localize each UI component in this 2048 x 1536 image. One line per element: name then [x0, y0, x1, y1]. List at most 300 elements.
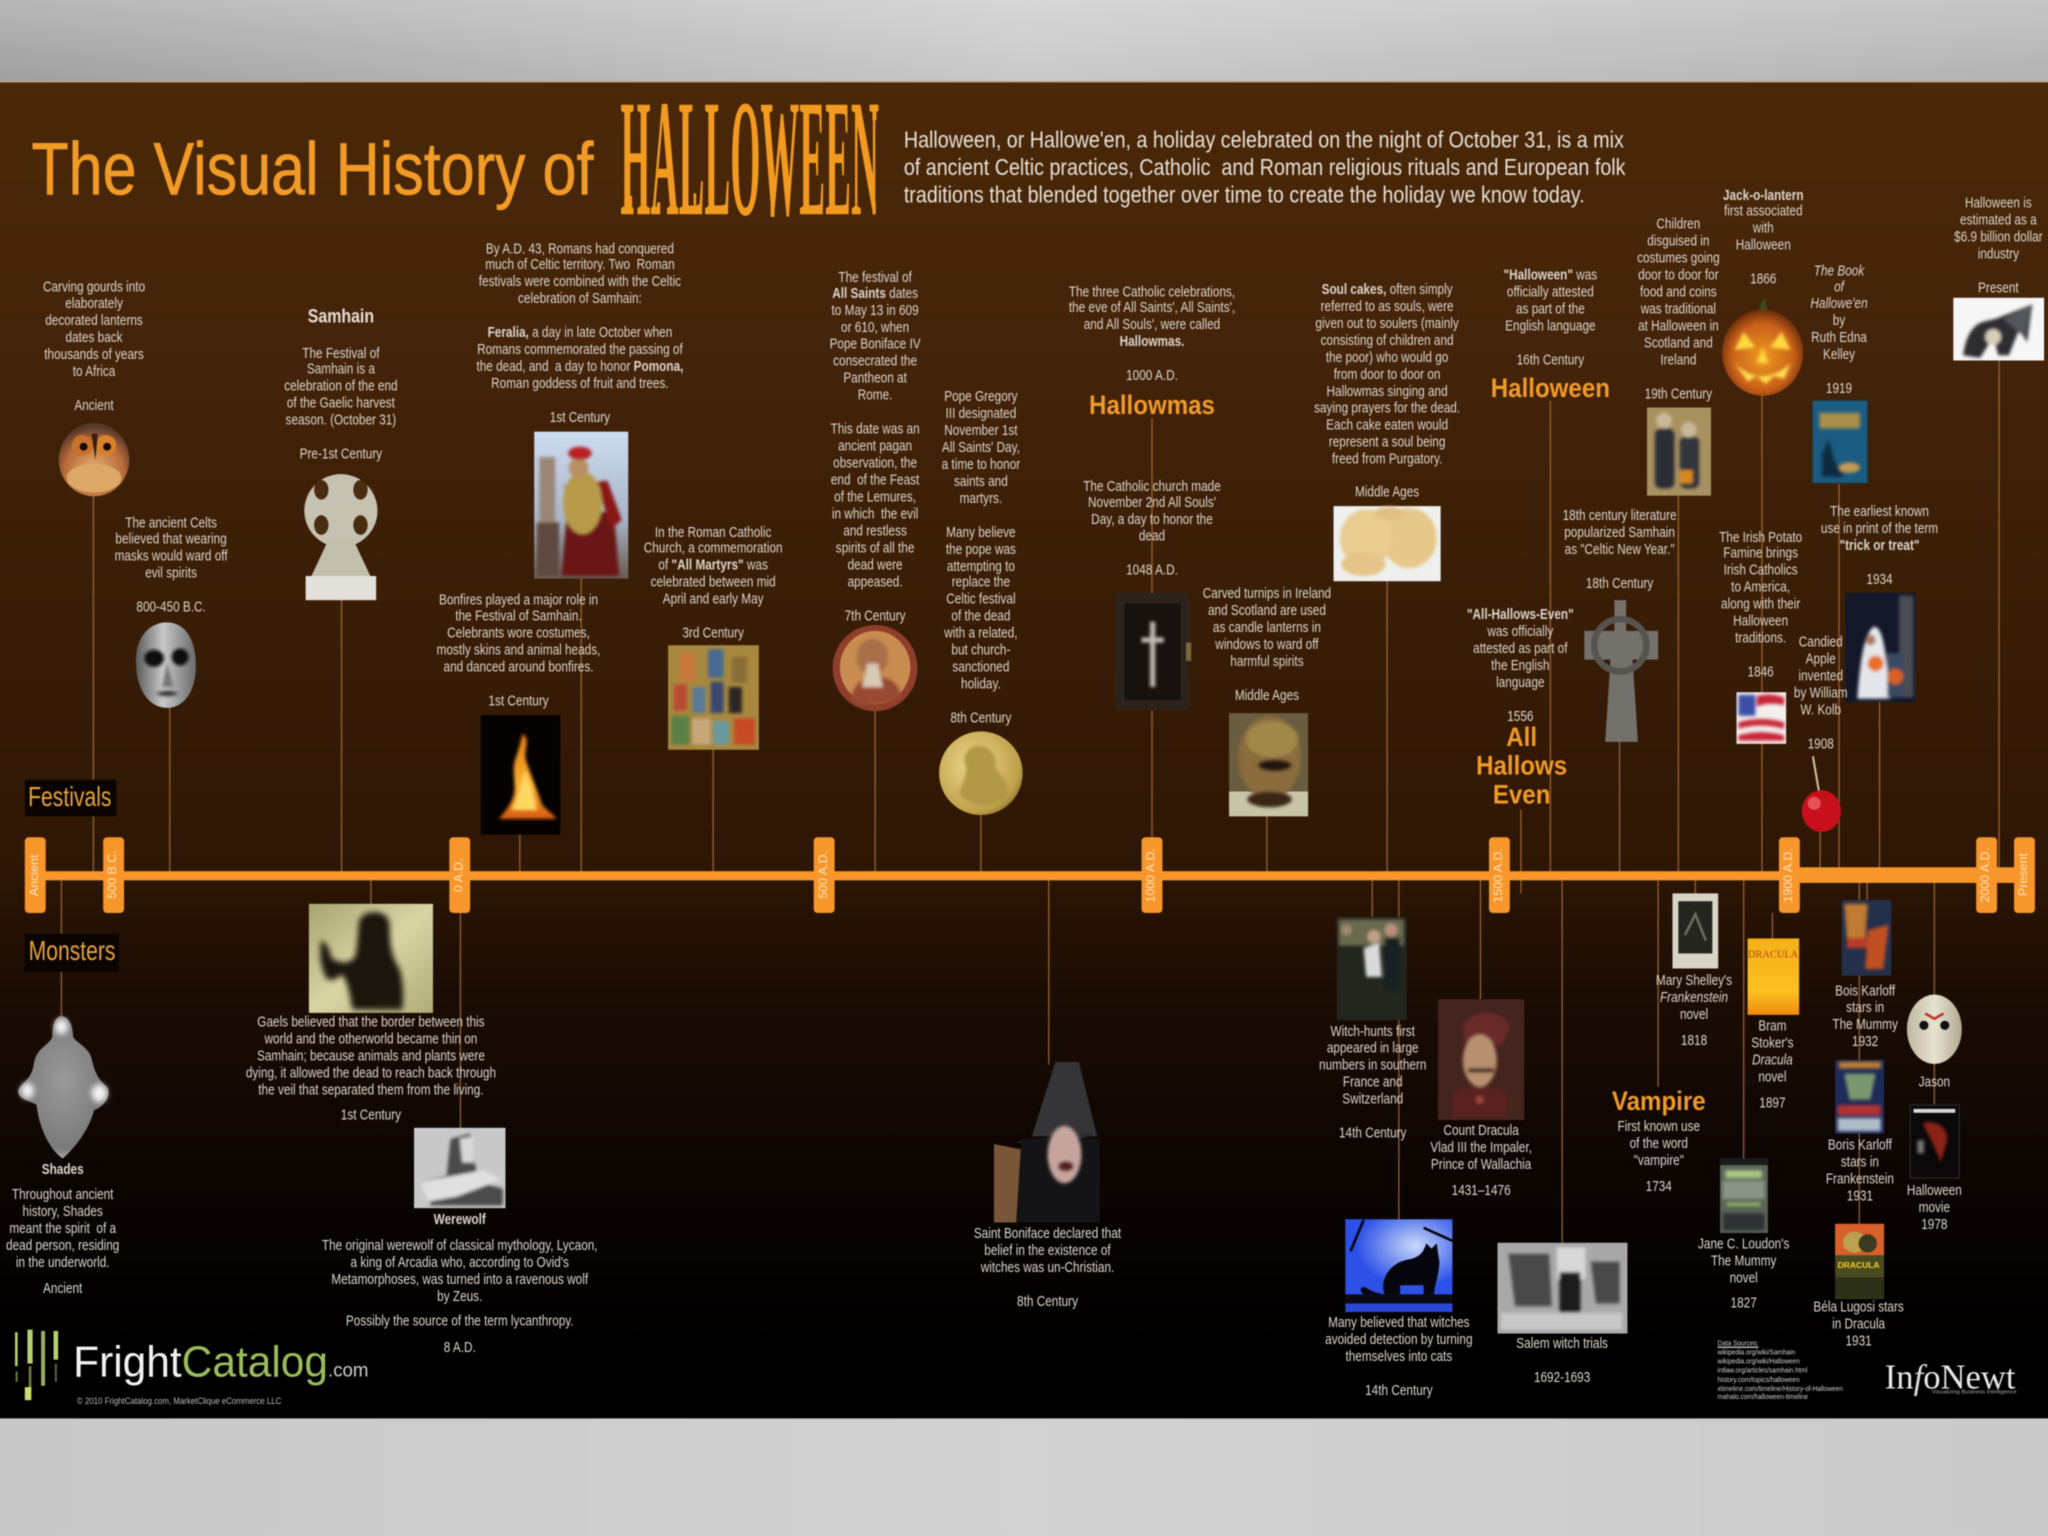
- tick: Present: Present: [2017, 854, 2031, 896]
- text: Bela Lugosi: Béla Lugosi stars: [1813, 1300, 1904, 1315]
- tick: 2000 A.D.: [1976, 837, 1997, 913]
- text: Pope Gregory: but church-: [951, 643, 1010, 659]
- text: candied apple: Apple: [1805, 652, 1835, 667]
- text: Bram Stoker: novel 1897: [1758, 1070, 1786, 1111]
- intro paragraph: traditions that blended together over time to create the holiday we know today.: [904, 182, 1585, 208]
- heading: Hallowmas: Hallowmas: [1089, 391, 1215, 421]
- text: All Martyrs: 3rd Century: [682, 626, 744, 642]
- text: witches into cats: avoided detection by turning: [1325, 1332, 1473, 1348]
- text: All Saints: and restless: [843, 523, 907, 539]
- image: Vlad the Impaler portrait: [1438, 999, 1524, 1120]
- tick: 2000 A.D.: 2000 A.D.: [1979, 848, 1993, 902]
- text: Gaels believed: dying, it allowed the dead to reach back through: [245, 1066, 495, 1081]
- image: witch-hunt painting: [1337, 917, 1407, 1020]
- text: Halloween attested: "Halloween" was: [1504, 268, 1597, 283]
- text: All Saints: This date was an: [831, 422, 920, 438]
- image: Dracula novel: [1748, 938, 1799, 1015]
- text: Gaels believed: [245, 1014, 496, 1124]
- text: Shades: meant the spirit of a: [9, 1221, 116, 1237]
- text: All Saints: or 610, when: [841, 320, 909, 336]
- heading: All Hallows Even: [1475, 722, 1567, 810]
- image: shadow figure behind veil: [309, 904, 433, 1013]
- text: All Saints: appeased.: [848, 574, 903, 590]
- text: soul cakes: referred to as souls, were: [1321, 299, 1454, 315]
- text: Celtic New Year: [1562, 508, 1677, 592]
- intro paragraph: [903, 127, 1626, 208]
- text: Karloff The Mummy: stars in: [1846, 1000, 1884, 1016]
- text: ancient Celts masks: [114, 515, 228, 616]
- image: Mummy novel: [1720, 1159, 1768, 1233]
- image: trick or treat photo: [1846, 593, 1915, 702]
- text: All Saints: dead were: [848, 557, 903, 573]
- text: Pope Gregory: replace the: [952, 575, 1010, 591]
- text: Werewolf: Werewolf The original werewolf of classical mythology, Lycaon,: [322, 1212, 598, 1254]
- image: stone Celtic cross: [304, 474, 377, 600]
- text: carving gourds: thousands of years: [44, 347, 143, 363]
- tick: 1500 A.D.: 1500 A.D.: [1491, 848, 1505, 902]
- text: jack-o-lantern: Halloween: [1736, 238, 1791, 254]
- tick: 1500 A.D.: [1488, 837, 1509, 913]
- text: Halloween movie: 1978: [1921, 1217, 1947, 1233]
- text: three Catholic celebrations: the eve of All Saints', All Saints',: [1069, 301, 1235, 317]
- text: Book of Hallowe'en: 1919: [1826, 382, 1852, 397]
- text: bonfires: [436, 592, 600, 710]
- text: bonfires: Celebrants wore costumes,: [447, 626, 590, 642]
- text: Irish Potato Famine: 1846: [1748, 665, 1774, 681]
- text: bonfires: and danced around bonfires.: [444, 660, 594, 676]
- text: Bela Lugosi: 1931: [1845, 1333, 1872, 1349]
- text: industry estimate: Present: [1978, 281, 2019, 296]
- heading: All Hallows Even: Hallows: [1475, 751, 1567, 781]
- text: Book of Hallowe'en: [1810, 263, 1868, 397]
- image: Salem witch trials engraving: [1497, 1243, 1627, 1334]
- text: Shades: Shades Throughout ancient: [12, 1162, 113, 1203]
- text: All Souls' Day: November 2nd All Souls': [1088, 496, 1216, 511]
- text: All Saints: end of the Feast: [831, 473, 919, 488]
- text: Bela Lugosi: in Dracula: [1832, 1317, 1885, 1332]
- text: Pope Gregory: with a related,: [944, 626, 1018, 642]
- text: Jane Loudon: novel 1827: [1730, 1271, 1758, 1311]
- image: Jason hockey mask: [1907, 995, 1962, 1064]
- tick: Ancient: Ancient: [27, 854, 42, 896]
- text: Romans and Feralia: 1st Century: [550, 410, 610, 426]
- text: children in costume: Scotland and: [1644, 335, 1713, 351]
- text: jack-o-lantern: first associated: [1724, 204, 1803, 220]
- text: Irish Potato Famine: Irish Catholics: [1724, 563, 1798, 579]
- text: carved turnips: harmful spirits: [1230, 654, 1304, 670]
- data sources: Data Sources:: [1718, 1340, 1759, 1348]
- text: All Saints: observation, the: [833, 456, 917, 471]
- intro paragraph: Halloween, or Hallowe'en, a holiday celebrated on the night of October 31, is a mix: [904, 127, 1624, 153]
- title: Halloween wordmark: HALLOWEEN: [620, 65, 879, 251]
- image: jack-o'-lantern: [1722, 298, 1803, 396]
- text: Bram Stoker: Stoker's: [1751, 1036, 1794, 1051]
- text: children in costume: was traditional: [1641, 301, 1716, 317]
- text: three Catholic celebrations: and All Souls', were called: [1084, 318, 1220, 334]
- text: ancient Celts masks: 800-450 B.C.: [136, 600, 206, 616]
- text: Count Dracula: Vlad III the Impaler,: [1430, 1140, 1531, 1156]
- text: Saint Boniface: Saint Boniface declared that: [974, 1226, 1121, 1242]
- text: soul cakes: the poor) who would go: [1326, 350, 1448, 365]
- text: Jane Loudon: [1698, 1236, 1790, 1311]
- InfoNewt tagline: Visualizing Business Intelligence: [1932, 1388, 2017, 1395]
- text: Romans and Feralia: much of Celtic territory. Two Roman: [485, 258, 675, 274]
- intro paragraph: of ancient Celtic practices, Catholic and Roman religious rituals and European folk: [904, 154, 1626, 180]
- text: trick or treat: "trick or treat": [1840, 538, 1919, 554]
- text: Celtic New Year: popularized Samhain: [1564, 525, 1675, 541]
- image: candied apple: [1802, 756, 1841, 832]
- data sources: xtimeline.com/timeline/History-of-Halloween: [1718, 1385, 1843, 1393]
- image: soul cakes: [1334, 506, 1441, 581]
- text: All-Hallows-Even: [1467, 607, 1574, 725]
- text: festival of Samhain: Pre-1st Century: [300, 447, 382, 463]
- text: carved turnips: as candle lanterns in: [1213, 620, 1321, 636]
- text: Irish Potato Famine: [1718, 530, 1802, 681]
- text: three Catholic celebrations: 1000 A.D.: [1126, 369, 1178, 384]
- text: witch-hunts: appeared in large: [1326, 1041, 1418, 1057]
- text: All Saints: consecrated the: [833, 354, 917, 370]
- text: Pope Gregory: attempting to: [947, 558, 1015, 574]
- text: Halloween movie: [1906, 1183, 1962, 1233]
- text: All Saints: of the Lemures,: [834, 490, 916, 505]
- text: Saint Boniface: witches was un-Christian.: [981, 1260, 1114, 1276]
- text: Pope Gregory: III designated: [946, 406, 1016, 422]
- text: All Saints: All Saints dates: [832, 287, 918, 302]
- text: festival of Samhain: [284, 345, 398, 463]
- text: jack-o-lantern: Jack-o-lantern: [1723, 187, 1804, 203]
- text: jack-o-lantern: 1866: [1750, 272, 1776, 288]
- image: shade ghost: [18, 1016, 109, 1159]
- text: Irish Potato Famine: The Irish Potato: [1719, 530, 1802, 545]
- text: Book of Hallowe'en: Hallowe'en: [1810, 297, 1868, 313]
- text: festival of Samhain: The Festival of: [302, 345, 380, 361]
- text: Book of Hallowe'en: of: [1834, 280, 1844, 296]
- text: soul cakes: Hallowmas singing and: [1327, 384, 1448, 399]
- text: carved turnips: Carved turnips in Ireland: [1203, 586, 1331, 602]
- text: bonfires: mostly skins and animal heads,: [437, 643, 600, 659]
- text: children in costume: 19th Century: [1645, 386, 1712, 402]
- text: Bela Lugosi: [1813, 1300, 1904, 1349]
- text: jack-o-lantern: [1722, 187, 1804, 288]
- data sources: mahalo.com/halloween-timeline: [1718, 1394, 1808, 1402]
- text: Bram Stoker: Bram: [1758, 1019, 1786, 1034]
- text: Pope Gregory: November 1st: [944, 423, 1018, 439]
- text: Halloween attested: 16th Century: [1517, 352, 1584, 368]
- text: first known use of vampire: [1617, 1119, 1700, 1195]
- text: Romans and Feralia: celebration of Samhain:: [518, 292, 642, 307]
- text: children in costume: [1636, 216, 1720, 402]
- text: All Martyrs: of "All Martyrs" was: [658, 558, 768, 574]
- text: Werewolf: Metamorphoses, was turned into a ravenous wolf: [331, 1272, 588, 1288]
- text: Gaels believed: the veil that separated them from the living. 1st Century: [258, 1083, 483, 1123]
- text: Pope Gregory: holiday.: [961, 677, 1001, 693]
- data sources: intlaw.org/articles/samhain.html: [1718, 1367, 1807, 1375]
- text: trick or treat: use in print of the term: [1821, 521, 1938, 537]
- text: Count Dracula: Prince of Wallachia 1431–1476: [1430, 1157, 1531, 1199]
- text: Karloff Frankenstein: Frankenstein: [1826, 1171, 1894, 1187]
- text: carving gourds: to Africa: [72, 364, 115, 380]
- data sources: wikipedia.org/wiki/Samhain: [1718, 1349, 1795, 1357]
- data sources: wikipedia.org/wiki/Halloween: [1718, 1358, 1800, 1366]
- text: Book of Hallowe'en: by: [1833, 314, 1845, 330]
- text: Salem witch trials: [1516, 1336, 1608, 1386]
- text: Count Dracula: [1430, 1123, 1532, 1199]
- tick: 500 B.C.: 500 B.C.: [106, 851, 120, 899]
- tick: Ancient: [25, 837, 46, 913]
- tick: 1000 A.D.: [1142, 837, 1162, 913]
- text: Shades: [6, 1162, 120, 1297]
- heading: All Hallows Even: Even: [1492, 780, 1550, 810]
- text: ancient Celts masks: masks would ward off: [115, 549, 228, 565]
- text: industry estimate: estimated as a: [1960, 213, 2037, 229]
- text: Saint Boniface: [974, 1226, 1122, 1310]
- text: Mary Shelley: Frankenstein: [1660, 990, 1728, 1006]
- text: Pope Gregory: saints and: [954, 474, 1008, 489]
- text: bonfires: the Festival of Samhain.: [455, 609, 582, 625]
- text: witches into cats: 14th Century: [1365, 1383, 1433, 1399]
- text: children in costume: Ireland: [1660, 352, 1696, 368]
- text: carved turnips: Middle Ages: [1235, 688, 1299, 704]
- text: Pope Gregory: Pope Gregory: [944, 389, 1018, 405]
- text: All Saints: to May 13 in 609: [832, 304, 919, 319]
- text: bonfires: 1st Century: [488, 694, 549, 710]
- text: Romans and Feralia: By A.D. 43, Romans had conquered: [486, 241, 674, 257]
- text: All Souls' Day: Day, a day to honor the: [1091, 513, 1213, 528]
- text: Werewolf: by Zeus. Possibly the source of the term lycanthropy. 8 A.D.: [346, 1289, 574, 1355]
- text: Mary Shelley: novel 1818: [1680, 1007, 1708, 1049]
- image: The Mummy poster: [1842, 900, 1891, 976]
- text: Celtic New Year: 18th century literature: [1563, 508, 1677, 524]
- image: Dracula poster: DRACULA: [1838, 1260, 1880, 1270]
- logo: FrightCatalog: FrightCatalog.com: [72, 1337, 368, 1386]
- text: candied apple: W. Kolb: [1800, 702, 1840, 718]
- category label: Festivals: Festivals: [28, 782, 112, 812]
- text: Jane Loudon: Jane C. Loudon's: [1698, 1237, 1789, 1253]
- text: soul cakes: Each cake eaten would: [1326, 417, 1448, 433]
- text: trick or treat: [1820, 504, 1938, 588]
- text: Romans and Feralia: festivals were combined with the Celtic: [479, 275, 681, 290]
- text: Pope Gregory: sanctioned: [952, 660, 1009, 676]
- text: festival of Samhain: Samhain is a: [307, 362, 375, 378]
- heading: Vampire: Vampire: [1611, 1087, 1705, 1117]
- image: witch figure, present: [1953, 298, 2044, 360]
- text: witch-hunts: Switzerland: [1342, 1092, 1403, 1107]
- text: Romans and Feralia: Feralia, a day in late October when: [488, 326, 672, 341]
- text: Salem witch trials: 1692-1693: [1534, 1370, 1590, 1386]
- text: trick or treat: The earliest known: [1830, 504, 1929, 520]
- tick: 1900 A.D.: [1779, 837, 1800, 913]
- text: Karloff Frankenstein: 1931: [1847, 1188, 1873, 1204]
- text: Book of Hallowe'en: Kelley: [1823, 348, 1855, 363]
- text: Pope Gregory: of the dead: [951, 609, 1010, 625]
- text: Saint Boniface: belief in the existence of: [984, 1243, 1111, 1259]
- text: carved turnips: [1202, 586, 1332, 704]
- data sources: history.com/topics/halloween: [1718, 1376, 1800, 1384]
- text: All Saints: 7th Century: [845, 608, 906, 624]
- text: All Saints: Rome.: [858, 388, 892, 404]
- text: ancient Celts masks: believed that wearing: [115, 532, 227, 548]
- text: soul cakes: Middle Ages: [1355, 485, 1419, 501]
- text: Karloff Frankenstein: [1826, 1138, 1894, 1204]
- text: Pope Gregory: 8th Century: [950, 711, 1011, 726]
- image: Pope Boniface portrait: [833, 625, 918, 711]
- text: carving gourds: elaborately: [65, 296, 122, 312]
- text: three Catholic celebrations: [1068, 284, 1235, 384]
- data sources: [1718, 1340, 1843, 1403]
- tick: Present: [2014, 837, 2035, 913]
- image: All Martyrs painting: [668, 645, 759, 750]
- image: Halloween movie poster: [1910, 1105, 1959, 1178]
- text: Jason: Jason: [1918, 1075, 1949, 1091]
- heading: All Hallows Even: All: [1506, 722, 1536, 752]
- text: Halloween attested: [1504, 268, 1598, 368]
- text: Mary Shelley: Mary Shelley's: [1656, 973, 1732, 989]
- text: All Souls' Day: The Catholic church made: [1083, 479, 1221, 494]
- text: All Saints: Pantheon at: [843, 371, 907, 387]
- image: Dracula poster: [1835, 1224, 1884, 1299]
- text: ancient Celts masks: The ancient Celts: [125, 515, 217, 531]
- text: Irish Potato Famine: Halloween: [1733, 614, 1788, 630]
- text: carving gourds: Ancient: [74, 398, 113, 414]
- text: Romans and Feralia: Roman goddess of fruit and trees.: [491, 376, 669, 392]
- text: Werewolf: [321, 1212, 598, 1355]
- text: ancient Celts masks: evil spirits: [145, 566, 197, 582]
- text: industry estimate: [1954, 196, 2044, 296]
- text: carved turnips: windows to ward off: [1215, 637, 1319, 653]
- image: American flag: [1736, 692, 1786, 744]
- text: carving gourds: dates back: [65, 330, 122, 346]
- image: black cat on moonlit window: [1345, 1219, 1452, 1312]
- text: soul cakes: from door to door on: [1334, 367, 1440, 382]
- heading: Samhain: Samhain: [308, 307, 374, 328]
- image: Book of Hallowe'en cover: [1812, 400, 1868, 483]
- text: Shades: in the underworld. Ancient: [16, 1255, 110, 1297]
- text: festival of Samhain: celebration of the end: [284, 379, 398, 395]
- decorative drips on the Halloween wordmark: [628, 104, 876, 217]
- text: All Souls' Day: 1048 A.D.: [1126, 563, 1178, 579]
- text: Gaels believed: Gaels believed that the border between this: [257, 1015, 484, 1031]
- tick: 1000 A.D.: 1000 A.D.: [1144, 848, 1159, 902]
- text: Pope Gregory: All Saints' Day,: [942, 440, 1020, 456]
- text: All-Hallows-Even: language: [1496, 675, 1545, 691]
- text: Book of Hallowe'en: Ruth Edna: [1811, 331, 1867, 347]
- tick: 1900 A.D.: 1900 A.D.: [1782, 848, 1796, 902]
- text: All-Hallows-Even: the English: [1491, 658, 1549, 674]
- text: All Saints: [830, 270, 922, 624]
- text: Halloween attested: officially attested: [1507, 285, 1594, 300]
- text: jack-o-lantern: with: [1753, 221, 1774, 237]
- text: carved turnips: and Scotland are used: [1208, 603, 1326, 619]
- text: witch-hunts: [1318, 1024, 1426, 1142]
- text: witch-hunts: France and: [1342, 1075, 1402, 1090]
- text: soul cakes: consisting of children and: [1321, 333, 1454, 349]
- image: shrieking witch: [994, 1062, 1100, 1223]
- text: candied apple: [1793, 634, 1848, 752]
- text: Celtic New Year: 18th Century: [1586, 576, 1653, 591]
- text: All-Hallows-Even: was officially: [1487, 624, 1553, 640]
- text: Irish Potato Famine: traditions.: [1735, 631, 1786, 647]
- text: three Catholic celebrations: The three Catholic celebrations,: [1069, 284, 1235, 300]
- text: Book of Hallowe'en: The Book: [1814, 263, 1864, 279]
- text: Bram Stoker: [1751, 1019, 1794, 1111]
- text: Gaels believed: world and the otherworld became thin on: [264, 1032, 477, 1047]
- copyright line: © 2010 FrightCatalog.com, MarketClique eCommerce LLC: [76, 1398, 281, 1407]
- text: first known use of vampire: "vampire" 1734: [1633, 1153, 1683, 1195]
- image: werewolf engraving: [414, 1128, 505, 1208]
- text: Halloween movie: movie: [1918, 1200, 1949, 1216]
- text: Karloff Frankenstein: Boris Karloff: [1828, 1138, 1892, 1153]
- text: bonfires: Bonfires played a major role in: [439, 592, 598, 608]
- text: witches into cats: Many believed that witches: [1328, 1315, 1470, 1331]
- text: Karloff Frankenstein: stars in: [1841, 1155, 1879, 1170]
- text: All Martyrs: celebrated between mid: [651, 575, 776, 591]
- text: All Souls' Day: [1082, 479, 1221, 579]
- category label: Monsters: Monsters: [28, 937, 115, 967]
- text: candied apple: Candied: [1798, 635, 1842, 650]
- text: Shades: dead person, residing: [6, 1238, 119, 1254]
- timeline bar thick section: [1788, 867, 2023, 883]
- text: Karloff The Mummy: 1932: [1852, 1034, 1878, 1050]
- text: Romans and Feralia: the dead, and a day to honor Pomona,: [476, 359, 683, 375]
- image: Frankenstein poster: [1835, 1060, 1884, 1134]
- text: witch-hunts: 14th Century: [1338, 1126, 1406, 1141]
- top grey band: [0, 0, 2048, 81]
- text: All Saints: Pope Boniface IV: [830, 337, 921, 353]
- text: Saint Boniface: 8th Century: [1017, 1294, 1078, 1310]
- text: first known use of vampire: First known use: [1617, 1119, 1699, 1135]
- text: three Catholic celebrations: Hallowmas.: [1120, 335, 1184, 351]
- text: candied apple: by William: [1793, 686, 1847, 701]
- text: candied apple: 1908: [1807, 736, 1833, 752]
- text: soul cakes: given out to soulers (mainly: [1315, 316, 1459, 332]
- image: gold medal: [939, 731, 1023, 815]
- text: All Martyrs: [644, 524, 783, 642]
- text: Halloween attested: as part of the: [1516, 302, 1585, 317]
- text: Bram Stoker: Dracula: [1752, 1053, 1793, 1068]
- bottom grey band: [0, 1418, 2048, 1536]
- text: children in costume: food and coins: [1640, 284, 1717, 300]
- image: Celtic mask: [136, 622, 196, 708]
- image: iron Celtic cross: [1584, 600, 1658, 742]
- image: carved turnip head: [1229, 713, 1308, 816]
- text: carving gourds: Carving gourds into: [42, 280, 144, 295]
- image: costumed children photo: [1647, 408, 1711, 496]
- text: witches into cats: [1324, 1315, 1473, 1399]
- text: first known use of vampire: of the word: [1629, 1136, 1687, 1152]
- text: All Saints: spirits of all the: [836, 540, 914, 556]
- text: All Saints: ancient pagan: [838, 439, 912, 455]
- tick: 0 A.D.: [449, 837, 470, 913]
- text: Irish Potato Famine: along with their: [1721, 597, 1800, 613]
- text: All Martyrs: Church, a commemoration: [644, 541, 783, 557]
- tick: 500 B.C.: [103, 837, 124, 913]
- text: All-Hallows-Even: 1556: [1507, 709, 1533, 725]
- text: industry estimate: industry: [1978, 247, 2019, 262]
- image: Frankenstein book: [1672, 893, 1718, 968]
- text: soul cakes: Soul cakes, often simply: [1322, 282, 1453, 298]
- text: candied apple: invented: [1798, 669, 1842, 684]
- text: Pope Gregory: [941, 389, 1021, 726]
- text: industry estimate: $6.9 billion dollar: [1954, 230, 2043, 245]
- text: children in costume: door to door for: [1638, 268, 1719, 283]
- text: Karloff The Mummy: The Mummy: [1832, 1017, 1898, 1033]
- text: children in costume: disguised in: [1647, 234, 1709, 249]
- text: All Souls' Day: dead: [1139, 529, 1165, 545]
- image: bonfire: [481, 715, 560, 835]
- text: All Saints: The festival of: [838, 270, 912, 285]
- heading: Halloween: Halloween: [1491, 374, 1610, 404]
- text: festival of Samhain: season. (October 31): [286, 413, 396, 429]
